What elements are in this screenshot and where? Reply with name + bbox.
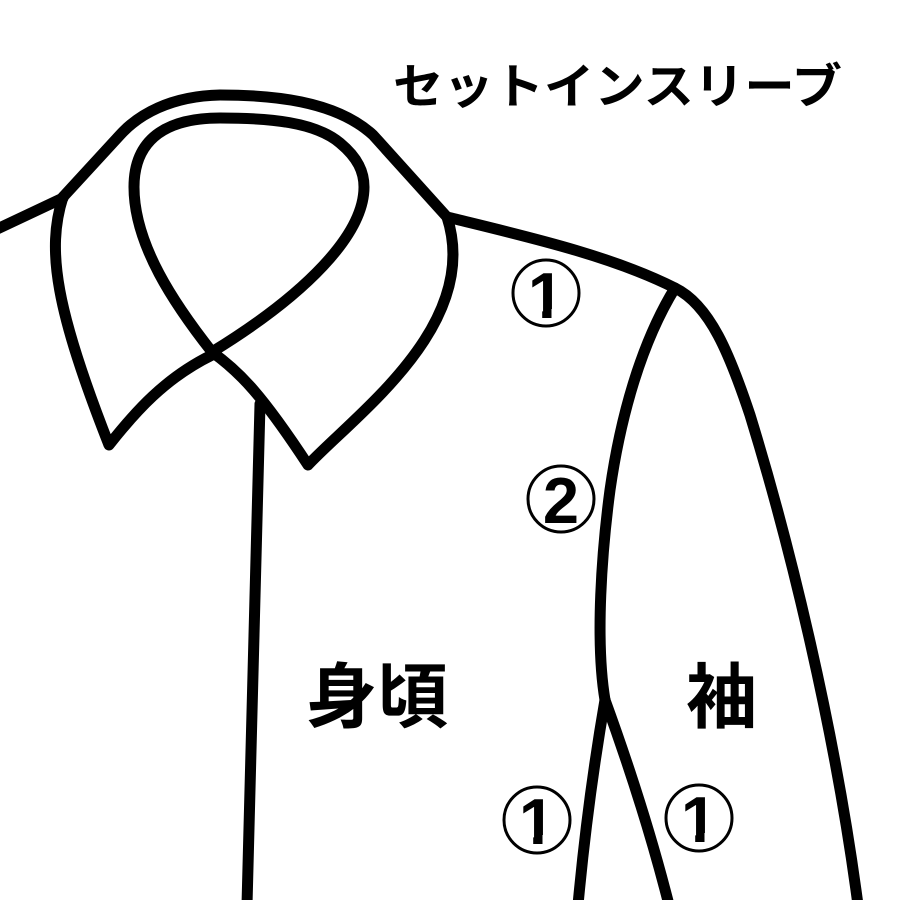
label: circled 1 body: [504, 785, 570, 858]
left shoulder: [0, 198, 63, 230]
underarm body side: [578, 700, 605, 900]
label: circled 1 sleeve: 1: [681, 783, 717, 856]
label: circled 2 armhole: [528, 464, 594, 537]
armhole seam: [600, 288, 675, 700]
label: circled 1 sleeve: [666, 783, 732, 856]
label: sleeve: 袖: [686, 659, 757, 738]
label: circled 1 shoulder: [513, 259, 579, 332]
label: circled 1 body: 1: [519, 785, 555, 858]
label: body: 身頃: [306, 659, 448, 738]
label: circled 2 armhole: 2: [543, 464, 579, 537]
right shoulder and outer sleeve: [447, 217, 858, 900]
left collar flap: [55, 197, 212, 445]
title: セットインスリーブ: [393, 61, 842, 114]
placket: [247, 404, 260, 900]
label: circled 1 shoulder: 1: [528, 259, 564, 332]
underarm sleeve: [605, 700, 669, 900]
inner collar band: [134, 118, 364, 352]
outer collar: [63, 95, 447, 217]
right collar flap: [212, 217, 453, 465]
